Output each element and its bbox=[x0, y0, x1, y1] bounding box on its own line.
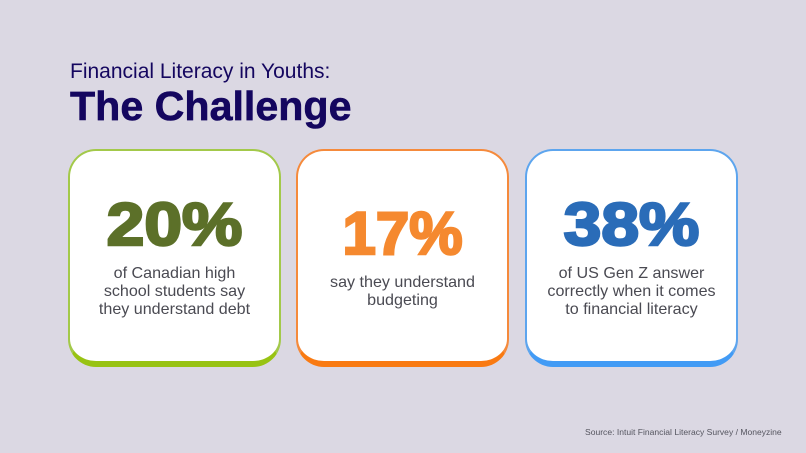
panel: budgeting statistic bbox=[296, 149, 509, 367]
description: financial literacy: of US Gen Z answer bbox=[559, 264, 704, 282]
statistic: 17%: 17% bbox=[342, 200, 463, 267]
panel: debt statistic bbox=[68, 149, 281, 367]
description: debt: school students say bbox=[104, 282, 245, 300]
statistic: 20%: 20% bbox=[107, 191, 242, 258]
description: financial literacy: to financial literacy bbox=[565, 300, 698, 318]
description: debt bbox=[99, 264, 250, 318]
description: debt: of Canadian high bbox=[114, 264, 235, 282]
subtitle: Financial Literacy in Youths: bbox=[70, 60, 330, 83]
description: budgeting: say they understand bbox=[330, 273, 475, 291]
panel: financial literacy statistic bbox=[525, 149, 738, 367]
description: budgeting bbox=[330, 273, 475, 309]
description: financial literacy bbox=[547, 264, 716, 318]
source note: Source: Intuit Financial Literacy Survey / Moneyzine bbox=[585, 427, 782, 437]
description: debt: they understand debt bbox=[99, 300, 250, 318]
description: budgeting: budgeting bbox=[367, 291, 438, 309]
statistic: 38%: 38% bbox=[564, 191, 699, 258]
title: The Challenge bbox=[70, 83, 352, 129]
description: financial literacy: correctly when it comes bbox=[547, 282, 716, 300]
